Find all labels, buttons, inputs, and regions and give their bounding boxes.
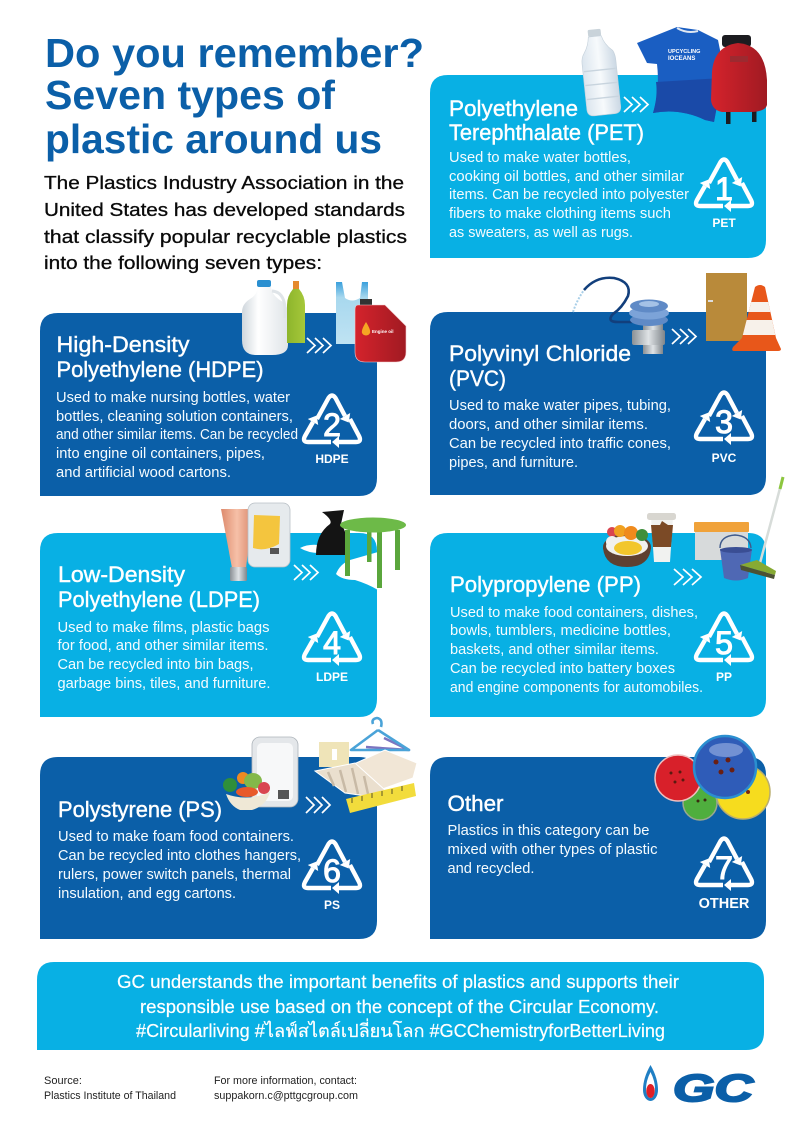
icon: cosmetic tube: [221, 509, 253, 581]
icon: t-shirt: UPCYCLING: [668, 49, 700, 55]
icon: recycling code 4 LDPE: [304, 614, 360, 684]
icon: traffic cone: [732, 285, 781, 351]
PP description: bowls, tumblers, medicine bottles,: [450, 623, 671, 639]
icon: power switch: [319, 742, 349, 767]
PVC heading: (PVC): [449, 366, 506, 391]
arrows: PP: [674, 569, 701, 585]
panel: PS: [40, 718, 417, 939]
PS heading: Polystyrene (PS): [58, 797, 222, 822]
icon: buttons: [655, 736, 770, 820]
source note: [44, 1075, 176, 1102]
intro text: [44, 172, 407, 273]
LDPE heading: [58, 562, 260, 612]
PVC description: doors, and other similar items.: [449, 417, 648, 433]
icon: tumbler: [647, 513, 676, 562]
icon: recycling code 7 Other: OTHER: [699, 896, 750, 912]
PS description: Used to make foam food containers.: [58, 829, 294, 845]
icon: food bowl: [603, 525, 651, 567]
icon: mop: [740, 477, 783, 579]
LDPE heading: Polyethylene (LDPE): [58, 587, 260, 612]
LDPE description: Can be recycled into bin bags,: [58, 657, 254, 673]
PET heading: Terephthalate (PET): [449, 120, 644, 145]
icon: white spill: [300, 545, 378, 590]
PET description: cooking oil bottles, and other similar: [449, 169, 684, 185]
PVC heading: [449, 341, 631, 391]
intro text: that classify popular recyclable plastics: [44, 226, 407, 247]
icon: recycling code 6 PS: [304, 842, 360, 912]
icon: foam tray: [252, 737, 298, 807]
HDPE description: bottles, cleaning solution containers,: [56, 409, 293, 425]
HDPE heading: Polyethylene (HDPE): [56, 357, 264, 382]
HDPE description: and artificial wood cartons.: [56, 465, 231, 481]
PS description: insulation, and egg cartons.: [58, 886, 236, 902]
icon: recycling code 3 PVC: PVC: [712, 451, 737, 465]
banner: [37, 962, 764, 1050]
LDPE description: [58, 620, 270, 692]
icon: recycling code 1 PET: PET: [712, 216, 736, 230]
Other heading: Other: [448, 791, 504, 816]
panel: LDPE: [40, 503, 406, 717]
icon: recycling code 2 HDPE: [304, 396, 360, 466]
HDPE description: and other similar items. Can be recycled: [56, 427, 298, 443]
contact note: suppakorn.c@pttgcgroup.com: [214, 1090, 358, 1102]
HDPE description: [56, 390, 298, 481]
PP heading: Polypropylene (PP): [450, 572, 641, 597]
PP description: baskets, and other similar items.: [450, 642, 659, 658]
icon: recycling code 2 HDPE: HDPE: [315, 452, 349, 466]
PET description: [449, 150, 689, 241]
HDPE description: Used to make nursing bottles, water: [56, 390, 290, 406]
contact note: For more information, contact:: [214, 1075, 357, 1087]
title: [45, 30, 424, 162]
icon: recycling code 5 PP: [696, 614, 752, 684]
icon: car battery: [694, 522, 749, 560]
logo: GC: GC: [673, 1068, 754, 1110]
icon: recycling code 5 PP: PP: [716, 670, 732, 684]
arrows: LDPE: [294, 565, 318, 580]
icon: recycling code 7 Other: 7: [715, 850, 733, 886]
intro text: The Plastics Industry Association in the: [44, 172, 404, 193]
Other description: [448, 823, 658, 877]
intro text: United States has developed standards: [44, 199, 405, 220]
banner: #Circularliving #ไลฟ์สไตล์เปลี่ยนโลก #GCChemistryforBetterLiving: [136, 1018, 665, 1041]
HDPE heading: High-Density: [56, 332, 190, 357]
PVC description: Can be recycled into traffic cones,: [449, 436, 671, 452]
panel: HDPE: [40, 280, 406, 496]
LDPE description: for food, and other similar items.: [58, 638, 268, 654]
LDPE description: Used to make films, plastic bags: [58, 620, 270, 636]
HDPE heading: [56, 332, 264, 382]
title: Seven types of: [45, 72, 335, 118]
icon: hose: [573, 278, 632, 322]
icon: recycling code 1 PET: [696, 160, 752, 230]
icon: engine oil can: Engine oil: [372, 329, 394, 334]
LDPE heading: Low-Density: [58, 562, 185, 587]
icon: recycling code 7 Other: [696, 838, 752, 912]
PS description: Can be recycled into clothes hangers,: [58, 848, 301, 864]
banner: responsible use based on the concept of the Circular Economy.: [140, 997, 659, 1017]
contact note: [214, 1075, 358, 1102]
PET heading: Polyethylene: [449, 96, 578, 121]
icon: recycling code 3 PVC: [696, 392, 752, 465]
icon: recycling code 1 PET: 1: [715, 171, 733, 207]
Other description: Plastics in this category can be: [448, 823, 650, 839]
panel: Other: [430, 736, 770, 939]
icon: clothes hanger: [351, 718, 409, 750]
icon: t-shirt: IOCEANS: [668, 56, 695, 62]
icon: pipe coil and fitting: [629, 300, 669, 354]
source note: Plastics Institute of Thailand: [44, 1090, 176, 1102]
icon: recycling code 4 LDPE: LDPE: [316, 670, 348, 684]
icon: vegetable bowl: [223, 772, 270, 810]
PVC heading: Polyvinyl Chloride: [449, 341, 631, 366]
HDPE description: into engine oil containers, pipes,: [56, 446, 265, 462]
icon: bucket: [720, 535, 752, 580]
icon: recycling code 6 PS: 6: [323, 853, 341, 889]
title: plastic around us: [45, 116, 382, 162]
PP description: and engine components for automobiles.: [450, 680, 703, 696]
arrows: PVC: [672, 329, 696, 344]
icon: recycling code 4 LDPE: 4: [323, 625, 341, 661]
icon: door: [706, 273, 747, 341]
arrows: PET: [624, 97, 648, 112]
PS description: rulers, power switch panels, thermal: [58, 867, 291, 883]
icon: backpack: [711, 35, 767, 124]
PVC description: pipes, and furniture.: [449, 455, 578, 471]
LDPE description: garbage bins, tiles, and furniture.: [58, 676, 270, 692]
icon: black bin bag: [316, 510, 347, 555]
source note: Source:: [44, 1075, 82, 1087]
Other description: and recycled.: [448, 861, 534, 877]
logo: GC: [643, 1065, 754, 1110]
icon: recycling code 3 PVC: 3: [715, 404, 733, 440]
PET description: as sweaters, as well as rugs.: [449, 225, 633, 241]
icon: green table: [340, 518, 406, 588]
icon: water bottle: [579, 27, 621, 117]
intro text: into the following seven types:: [44, 252, 322, 273]
PP description: Used to make food containers, dishes,: [450, 605, 698, 621]
icon: yellow ruler: [346, 783, 416, 813]
PET heading: [449, 96, 644, 145]
icon: engine oil can: [355, 299, 406, 362]
PVC description: Used to make water pipes, tubing,: [449, 398, 671, 414]
panel: PP: [430, 477, 783, 717]
icon: food tray with cheese: [248, 503, 290, 567]
panel: PET: [430, 27, 767, 258]
PVC description: [449, 398, 671, 471]
title: Do you remember?: [45, 30, 424, 76]
icon: t-shirt: [637, 27, 724, 122]
arrows: PS: [306, 797, 330, 813]
PET description: items. Can be recycled into polyester: [449, 187, 689, 203]
PET description: Used to make water bottles,: [449, 150, 631, 166]
PET description: fibers to make clothing items such: [449, 206, 671, 222]
icon: green bottle: [287, 281, 305, 343]
icon: recycling code 6 PS: PS: [324, 898, 340, 912]
icon: plastic bag: [336, 282, 368, 344]
icon: white jug: [242, 280, 288, 355]
icon: egg carton: [315, 750, 417, 797]
PP description: Can be recycled into battery boxes: [450, 661, 675, 677]
panel: PVC: [430, 273, 781, 495]
PP description: [450, 605, 703, 696]
PS description: [58, 829, 301, 902]
icon: recycling code 5 PP: 5: [715, 625, 733, 661]
arrows: HDPE: [307, 338, 331, 353]
Other description: mixed with other types of plastic: [448, 842, 658, 858]
banner: GC understands the important benefits of plastics and supports their: [117, 972, 679, 992]
icon: recycling code 2 HDPE: 2: [323, 407, 341, 443]
